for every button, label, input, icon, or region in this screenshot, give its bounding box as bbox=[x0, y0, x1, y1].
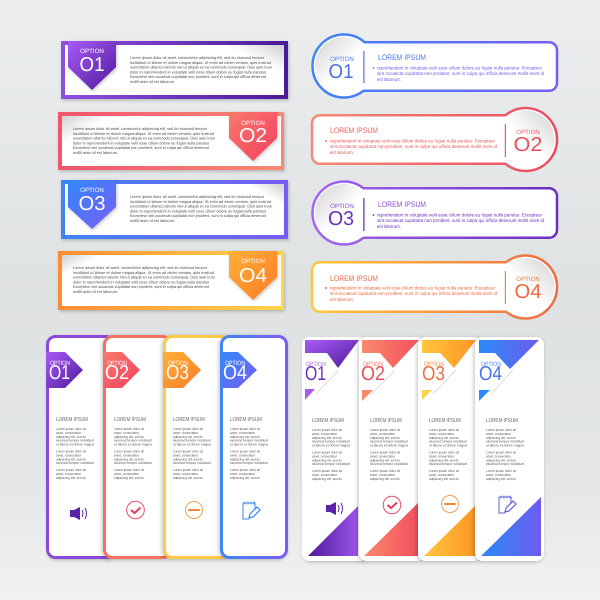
text block: pill 02: est laborum. bbox=[330, 150, 354, 156]
text block: card 01: Lorem ipsum dolor sit bbox=[56, 450, 86, 454]
text block: card 03: Lorem ipsum dolor sit bbox=[173, 450, 203, 454]
text block: option 03: dolor in reprehenderit in voluptate velit esse cillum dolore eu fugiat nulla pariatur. bbox=[130, 208, 267, 213]
text block: card 04 bbox=[230, 427, 268, 480]
text block: filled card 01: adipiscing elit, sed do bbox=[312, 436, 342, 440]
text block: option 02: Lorem ipsum dolor sit amet, consectetur adipiscing elit, sed do eiusmod tempor bbox=[73, 126, 208, 131]
panel: outlined card 01 bbox=[46, 336, 114, 558]
panel: pill option 03: O3 bbox=[328, 208, 354, 230]
text block: filled card 02: adipiscing elit, sed do bbox=[370, 436, 400, 440]
panel: outlined card 04 bbox=[221, 336, 286, 558]
panel: pill option 02 bbox=[312, 108, 557, 171]
text block: card 04: adipiscing elit, sed do bbox=[230, 476, 260, 480]
panel: outlined card 03 bbox=[163, 336, 228, 558]
panel: filled card 03 bbox=[418, 337, 482, 561]
text block: option 01: Lorem ipsum dolor sit amet, consectetur adipiscing elit, sed do eiusmod tempor bbox=[130, 55, 265, 60]
text block: filled card 01: Lorem ipsum dolor sit bbox=[312, 450, 342, 454]
ribbon: option 01 bbox=[68, 41, 116, 90]
text block: card 02: adipiscing elit, sed do bbox=[114, 457, 144, 461]
text block: filled card 04: adipiscing elit, sed do bbox=[486, 436, 516, 440]
text block: pill 01: sint occaecat cupidatat non proident, sunt in culpa qui officia deserunt mollit anim id bbox=[377, 71, 544, 77]
panel: pill option 02: OPTION bbox=[516, 129, 540, 136]
text block: card 03: amet, consectetur bbox=[173, 472, 199, 476]
text block: pill 03: sint occaecat cupidatat non proident, sunt in culpa qui officia deserunt mollit anim id bbox=[377, 218, 544, 224]
text block: card 02: eiusmod tempor incididunt bbox=[114, 439, 152, 443]
text block: card 02: Lorem ipsum dolor sit bbox=[114, 468, 144, 472]
text block: filled card 03: eiusmod tempor incididunt bbox=[429, 440, 467, 444]
ribbon: card 02 bbox=[103, 352, 140, 388]
text block: filled card 04: amet, consectetur bbox=[486, 454, 512, 458]
text block: pill 02: sint occaecat cupidatat non proident, sunt in culpa qui officia deserunt mollit anim id bbox=[330, 144, 497, 150]
text block: filled card 04: eiusmod tempor incididunt bbox=[486, 440, 524, 444]
text block: filled card 02: amet, consectetur bbox=[370, 454, 396, 458]
text block: card 02: amet, consectetur bbox=[114, 472, 140, 476]
ribbon: filled card 03: OPTION bbox=[424, 361, 444, 368]
panel: pill option 04: OPTION bbox=[516, 276, 540, 283]
text block: card 04: eiusmod tempor incididunt bbox=[230, 439, 268, 443]
text block: filled card 02: Lorem ipsum dolor sit bbox=[370, 450, 400, 454]
text block: filled card 01: Lorem ipsum dolor sit bbox=[312, 469, 342, 473]
ribbon: card 02: O2 bbox=[105, 362, 129, 384]
ribbon: option 03: OPTION bbox=[80, 187, 104, 194]
text block: card 04: Lorem ipsum dolor sit bbox=[230, 450, 260, 454]
text block: card 01: adipiscing elit, sed do bbox=[56, 457, 86, 461]
ribbon: filled card 01 bbox=[305, 340, 359, 400]
icon: minus bbox=[442, 496, 458, 512]
text block: option 03: Excepteur sint occaecat cupidatat non proident, sunt in culpa qui officia deserunt bbox=[130, 213, 267, 218]
text block: card 03: adipiscing elit, sed do bbox=[173, 457, 203, 461]
text block: filled card 04: ut labore et dolore magna bbox=[486, 444, 524, 448]
text block: option 03: mollit anim id est laborum. bbox=[130, 218, 175, 223]
heading: card 03: LOREM IPSUM bbox=[173, 417, 205, 423]
text block: option 02: exercitation ullamco laboris nisi ut aliquip ex ea commodo consequat. Duis aute irure bbox=[73, 136, 216, 141]
panel: pill option 02: O2 bbox=[514, 134, 542, 156]
text block: filled card 02: amet, consectetur bbox=[370, 473, 396, 477]
heading: filled card 03: LOREM IPSUM bbox=[429, 418, 461, 424]
ribbon: filled card 04 bbox=[479, 340, 539, 401]
heading: card 02: LOREM IPSUM bbox=[114, 417, 146, 423]
ribbon: filled card 02: O2 bbox=[361, 363, 385, 385]
heading: filled card 04: LOREM IPSUM bbox=[486, 418, 518, 424]
ribbon: filled card 02: OPTION bbox=[363, 361, 383, 368]
ribbon: option 03 bbox=[68, 180, 116, 229]
panel: pill option 01: O1 bbox=[328, 61, 354, 83]
ribbon: card 01: OPTION bbox=[50, 360, 70, 367]
text block: filled card 01: amet, consectetur bbox=[312, 454, 338, 458]
text block: filled card 01: adipiscing elit, sed do bbox=[312, 477, 342, 481]
text block: filled card 02: adipiscing elit, sed do bbox=[370, 458, 400, 462]
text block: filled card 04: Lorem ipsum dolor sit bbox=[486, 469, 516, 473]
text block: option 01 bbox=[130, 55, 273, 84]
ribbon: option 01: OPTION bbox=[80, 48, 104, 55]
heading: filled card 02: LOREM IPSUM bbox=[370, 418, 402, 424]
text block: filled card 03: amet, consectetur bbox=[429, 454, 455, 458]
icon: speaker bbox=[326, 502, 342, 515]
text block: pill 01: reprehenderit in voluptate velit esse cillum dolore eu fugiat nulla pariatur. Excepteur bbox=[377, 66, 542, 72]
panel: pill option 03 bbox=[312, 182, 557, 244]
ribbon: option 02: OPTION bbox=[241, 120, 265, 127]
text block: filled card 01: amet, consectetur bbox=[312, 473, 338, 477]
text block: card 03: adipiscing elit, sed do bbox=[173, 476, 203, 480]
text block: option 04: dolor in reprehenderit in voluptate velit esse cillum dolore eu fugiat nulla pariatur. bbox=[73, 279, 210, 284]
ribbon: filled card 02 bbox=[361, 340, 419, 401]
text block: filled card 02: eiusmod tempor incididunt bbox=[370, 462, 408, 466]
text block: card 01: Lorem ipsum dolor sit bbox=[56, 427, 86, 431]
text block: option 01: exercitation ullamco laboris nisi ut aliquip ex ea commodo consequat. Duis aute irure bbox=[130, 65, 273, 70]
corner triangle: filled card 03 bbox=[424, 505, 476, 556]
heading: card 04: LOREM IPSUM bbox=[230, 417, 262, 423]
text block: filled card 04: amet, consectetur bbox=[486, 432, 512, 436]
text block: filled card 02 bbox=[370, 428, 408, 481]
text block: option 04: Lorem ipsum dolor sit amet, consectetur adipiscing elit, sed do eiusmod tempor bbox=[73, 265, 208, 270]
text block: pill 01: est laborum. bbox=[377, 77, 401, 83]
ribbon: card 03: O3 bbox=[166, 362, 189, 384]
text block: card 01: ut labore et dolore magna bbox=[56, 443, 94, 447]
text block: filled card 01: amet, consectetur bbox=[312, 432, 338, 436]
text block: card 01: adipiscing elit, sed do bbox=[56, 435, 86, 439]
panel: pill option 01 bbox=[312, 35, 557, 98]
text block: card 01: eiusmod tempor incididunt bbox=[56, 439, 94, 443]
text block: pill 03 bbox=[373, 212, 544, 230]
panel: banner option 04 bbox=[58, 251, 284, 310]
text block: pill 02: reprehenderit in voluptate velit esse cillum dolore eu fugiat nulla pariatur. Excepteur bbox=[330, 138, 495, 144]
text block: card 04: adipiscing elit, sed do bbox=[230, 435, 260, 439]
ribbon: card 04 bbox=[221, 352, 257, 388]
panel: filled card 01 bbox=[302, 337, 368, 561]
text block: filled card 03: adipiscing elit, sed do bbox=[429, 458, 459, 462]
text block: filled card 03: adipiscing elit, sed do bbox=[429, 436, 459, 440]
text block: option 04 bbox=[73, 265, 216, 294]
heading: filled card 01: LOREM IPSUM bbox=[312, 418, 344, 424]
text block: card 04: ut labore et dolore magna bbox=[230, 443, 268, 447]
ribbon: filled card 03: O3 bbox=[422, 363, 445, 385]
text block: filled card 04 bbox=[486, 428, 524, 481]
text block: card 02: adipiscing elit, sed do bbox=[114, 435, 144, 439]
panel: banner option 01 bbox=[61, 41, 288, 99]
text block: card 02: amet, consectetur bbox=[114, 453, 140, 457]
ribbon: filled card 01: OPTION bbox=[306, 361, 326, 368]
corner triangle: filled card 02 bbox=[364, 503, 418, 556]
text block: option 04: incididunt ut labore et dolore magna aliqua. Ut enim ad minim veniam, quis nostrud bbox=[73, 270, 214, 275]
text block: option 03 bbox=[130, 194, 273, 223]
text block: filled card 03: eiusmod tempor incididunt bbox=[429, 462, 467, 466]
text block: card 03: eiusmod tempor incididunt bbox=[173, 461, 211, 465]
ribbon: card 03 bbox=[163, 352, 201, 388]
text block: card 02: ut labore et dolore magna bbox=[114, 443, 152, 447]
text block: filled card 01: ut labore et dolore magna bbox=[312, 444, 350, 448]
text block: filled card 03: Lorem ipsum dolor sit bbox=[429, 428, 459, 432]
panel: pill option 03: OPTION bbox=[330, 203, 354, 210]
heading: card 01: LOREM IPSUM bbox=[56, 417, 88, 423]
text block: filled card 02: Lorem ipsum dolor sit bbox=[370, 428, 400, 432]
text block: filled card 03: amet, consectetur bbox=[429, 432, 455, 436]
ribbon: card 01: O1 bbox=[49, 362, 70, 384]
panel: outlined card 02 bbox=[103, 336, 170, 558]
ribbon: option 01: O1 bbox=[80, 54, 104, 76]
panel: pill option 04: O4 bbox=[514, 281, 542, 303]
text block: card 02: Lorem ipsum dolor sit bbox=[114, 450, 144, 454]
text block: option 02 bbox=[73, 126, 216, 155]
heading: option 04: LOREM IPSUM bbox=[330, 274, 378, 283]
text block: card 04: Lorem ipsum dolor sit bbox=[230, 468, 260, 472]
text block: option 01: dolor in reprehenderit in voluptate velit esse cillum dolore eu fugiat nulla pariatur. bbox=[130, 69, 267, 74]
text block: card 03: Lorem ipsum dolor sit bbox=[173, 468, 203, 472]
text block: card 01: adipiscing elit, sed do bbox=[56, 476, 86, 480]
text block: pill 02 bbox=[325, 138, 497, 156]
text block: filled card 04: Lorem ipsum dolor sit bbox=[486, 450, 516, 454]
corner triangle: filled card 04 bbox=[481, 497, 541, 556]
ribbon: filled card 03 bbox=[422, 340, 476, 400]
ribbon: option 02 bbox=[229, 112, 277, 161]
text block: card 03: adipiscing elit, sed do bbox=[173, 435, 203, 439]
text block: card 02: amet, consectetur bbox=[114, 431, 140, 435]
text block: filled card 04: eiusmod tempor incididunt bbox=[486, 462, 524, 466]
text block: option 02: mollit anim id est laborum. bbox=[73, 150, 118, 155]
icon: check bbox=[383, 496, 401, 514]
text block: filled card 01 bbox=[312, 428, 350, 481]
text block: pill 04: sint occaecat cupidatat non proident, sunt in culpa qui officia deserunt mollit anim id bbox=[330, 291, 497, 297]
text block: option 01: mollit anim id est laborum. bbox=[130, 79, 175, 84]
heading: option 02: LOREM IPSUM bbox=[330, 126, 378, 135]
ribbon: option 04: O4 bbox=[239, 265, 267, 287]
text block: filled card 02: amet, consectetur bbox=[370, 432, 396, 436]
text block: filled card 02: ut labore et dolore magna bbox=[370, 444, 408, 448]
text block: card 03: amet, consectetur bbox=[173, 453, 199, 457]
ribbon: option 04 bbox=[229, 251, 277, 300]
ribbon: option 02: O2 bbox=[239, 125, 267, 147]
panel: banner option 03 bbox=[61, 180, 288, 239]
text block: card 02 bbox=[114, 427, 152, 480]
text block: filled card 03: ut labore et dolore magna bbox=[429, 444, 467, 448]
ribbon: card 02: OPTION bbox=[107, 360, 127, 367]
text block: option 02: dolor in reprehenderit in voluptate velit esse cillum dolore eu fugiat nulla pariatur. bbox=[73, 140, 210, 145]
text block: filled card 04: Lorem ipsum dolor sit bbox=[486, 428, 516, 432]
text block: card 03: amet, consectetur bbox=[173, 431, 199, 435]
text block: filled card 03: amet, consectetur bbox=[429, 473, 455, 477]
text block: filled card 01: eiusmod tempor incididunt bbox=[312, 440, 350, 444]
text block: option 03: exercitation ullamco laboris nisi ut aliquip ex ea commodo consequat. Duis aute irure bbox=[130, 204, 273, 209]
text block: filled card 03: Lorem ipsum dolor sit bbox=[429, 450, 459, 454]
text block: pill 03: est laborum. bbox=[377, 224, 401, 230]
text block: card 01: amet, consectetur bbox=[56, 472, 82, 476]
panel: pill option 04 bbox=[312, 255, 557, 319]
ribbon: filled card 04: OPTION bbox=[481, 361, 501, 368]
text block: card 02: eiusmod tempor incididunt bbox=[114, 461, 152, 465]
text block: card 03: Lorem ipsum dolor sit bbox=[173, 427, 203, 431]
text block: filled card 02: Lorem ipsum dolor sit bbox=[370, 469, 400, 473]
panel: filled card 02 bbox=[359, 337, 425, 561]
text block: pill 04: reprehenderit in voluptate velit esse cillum dolore eu fugiat nulla pariatur. Excepteur bbox=[330, 286, 495, 292]
text block: option 04: mollit anim id est laborum. bbox=[73, 289, 118, 294]
text block: option 04: exercitation ullamco laboris nisi ut aliquip ex ea commodo consequat. Duis aute irure bbox=[73, 275, 216, 280]
text block: filled card 03 bbox=[429, 428, 467, 481]
text block: filled card 01: Lorem ipsum dolor sit bbox=[312, 428, 342, 432]
icon: minus bbox=[186, 502, 202, 518]
text block: card 03: ut labore et dolore magna bbox=[173, 443, 211, 447]
icon: speaker bbox=[70, 507, 86, 520]
text block: card 04: amet, consectetur bbox=[230, 431, 256, 435]
text block: filled card 03: adipiscing elit, sed do bbox=[429, 477, 459, 481]
text block: filled card 01: eiusmod tempor incididunt bbox=[312, 462, 350, 466]
ribbon: card 01 bbox=[46, 352, 83, 388]
text block: card 01: amet, consectetur bbox=[56, 431, 82, 435]
ribbon: card 04: O4 bbox=[223, 362, 247, 384]
text block: option 01: Excepteur sint occaecat cupidatat non proident, sunt in culpa qui officia deserunt bbox=[130, 74, 267, 79]
corner triangle: filled card 01 bbox=[308, 506, 358, 556]
heading: option 01: LOREM IPSUM bbox=[378, 53, 426, 62]
heading: option 03: LOREM IPSUM bbox=[378, 200, 426, 209]
text block: card 04: Lorem ipsum dolor sit bbox=[230, 427, 260, 431]
text block: filled card 04: adipiscing elit, sed do bbox=[486, 477, 516, 481]
text block: card 03: eiusmod tempor incididunt bbox=[173, 439, 211, 443]
text block: filled card 02: adipiscing elit, sed do bbox=[370, 477, 400, 481]
panel: banner option 02 bbox=[58, 112, 284, 170]
text block: pill 01 bbox=[373, 66, 544, 83]
text block: option 01: incididunt ut labore et dolore magna aliqua. Ut enim ad minim veniam, quis nostrud bbox=[130, 60, 271, 65]
text block: card 04: amet, consectetur bbox=[230, 453, 256, 457]
text block: option 03: incididunt ut labore et dolore magna aliqua. Ut enim ad minim veniam, quis nostrud bbox=[130, 199, 271, 204]
text block: card 01: amet, consectetur bbox=[56, 453, 82, 457]
text block: option 04: Excepteur sint occaecat cupidatat non proident, sunt in culpa qui officia deserunt bbox=[73, 284, 210, 289]
text block: option 02: incididunt ut labore et dolore magna aliqua. Ut enim ad minim veniam, quis nostrud bbox=[73, 131, 214, 136]
text block: filled card 04: adipiscing elit, sed do bbox=[486, 458, 516, 462]
ribbon: option 03: O3 bbox=[78, 193, 106, 215]
icon: notepad bbox=[499, 496, 516, 513]
ribbon: option 04: OPTION bbox=[241, 258, 265, 265]
text block: option 03: Lorem ipsum dolor sit amet, consectetur adipiscing elit, sed do eiusmod tempor bbox=[130, 194, 265, 199]
text block: card 04: amet, consectetur bbox=[230, 472, 256, 476]
text block: pill 03: reprehenderit in voluptate velit esse cillum dolore eu fugiat nulla pariatur. Excepteur bbox=[377, 212, 542, 218]
panel: pill option 01: OPTION bbox=[330, 56, 354, 63]
text block: card 01: Lorem ipsum dolor sit bbox=[56, 468, 86, 472]
text block: filled card 03: Lorem ipsum dolor sit bbox=[429, 469, 459, 473]
text block: card 02: Lorem ipsum dolor sit bbox=[114, 427, 144, 431]
ribbon: filled card 01: O1 bbox=[305, 363, 326, 385]
text block: option 02: Excepteur sint occaecat cupidatat non proident, sunt in culpa qui officia deserunt bbox=[73, 145, 210, 150]
text block: filled card 04: amet, consectetur bbox=[486, 473, 512, 477]
text block: card 04: adipiscing elit, sed do bbox=[230, 457, 260, 461]
icon: check bbox=[127, 501, 144, 519]
ribbon: card 03: OPTION bbox=[168, 360, 188, 367]
ribbon: card 04: OPTION bbox=[225, 360, 245, 367]
ribbon: filled card 04: O4 bbox=[479, 363, 502, 385]
text block: card 01: eiusmod tempor incididunt bbox=[56, 461, 94, 465]
text block: pill 04 bbox=[325, 286, 497, 303]
text block: filled card 01: adipiscing elit, sed do bbox=[312, 458, 342, 462]
text block: card 04: eiusmod tempor incididunt bbox=[230, 461, 268, 465]
icon: notepad bbox=[243, 502, 260, 519]
panel: filled card 04 bbox=[475, 337, 544, 561]
text block: card 01 bbox=[56, 427, 94, 480]
text block: filled card 02: eiusmod tempor incididunt bbox=[370, 440, 408, 444]
text block: card 02: adipiscing elit, sed do bbox=[114, 476, 144, 480]
text block: card 03 bbox=[173, 427, 211, 480]
text block: pill 04: est laborum. bbox=[330, 297, 354, 303]
